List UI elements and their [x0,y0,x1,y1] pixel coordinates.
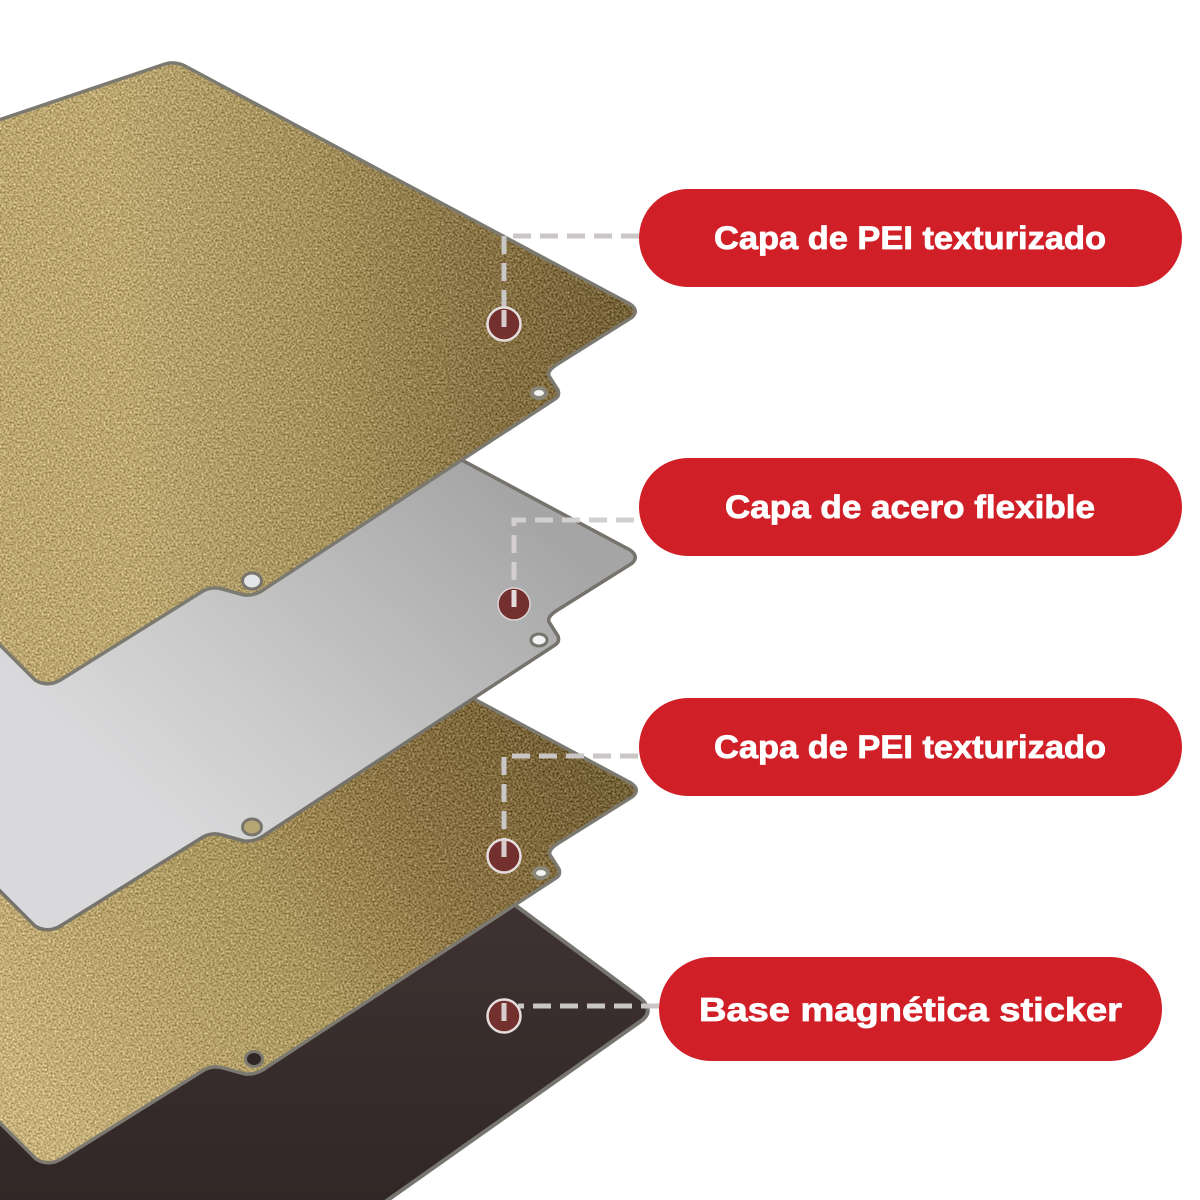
icon: steel hole right [531,634,547,646]
icon: steel hole left [242,819,262,835]
panel: magnetic base plate [0,850,648,1200]
icon: top plate hole left [242,573,262,589]
label: capa de PEI texturizado (bottom) [639,698,1182,796]
icon: mounting hole right [534,868,548,878]
icon: top plate hole right [532,388,546,398]
panel: lower textured PEI plate [0,542,636,1163]
label: capa de acero flexible: Capa de acero flexible [725,489,1095,525]
callout: connector 3 [488,756,638,872]
callout: connector 4 [488,1000,659,1032]
label: base magnética sticker [659,957,1162,1061]
icon: mounting hole left [246,1052,262,1066]
label: capa de PEI texturizado (bottom): Capa de PEI texturizado [714,729,1106,765]
panel: upper textured PEI plate [0,63,635,684]
label: base magnética sticker: Base magnética sticker [699,991,1122,1028]
callout: connector 2 [498,520,634,620]
label: capa de PEI texturizado (top): Capa de PEI texturizado [714,220,1106,256]
label: capa de PEI texturizado (top) [639,189,1182,287]
callout: connector 1 [488,236,640,340]
panel: flexible steel plate [0,309,635,930]
label: capa de acero flexible [639,458,1182,556]
